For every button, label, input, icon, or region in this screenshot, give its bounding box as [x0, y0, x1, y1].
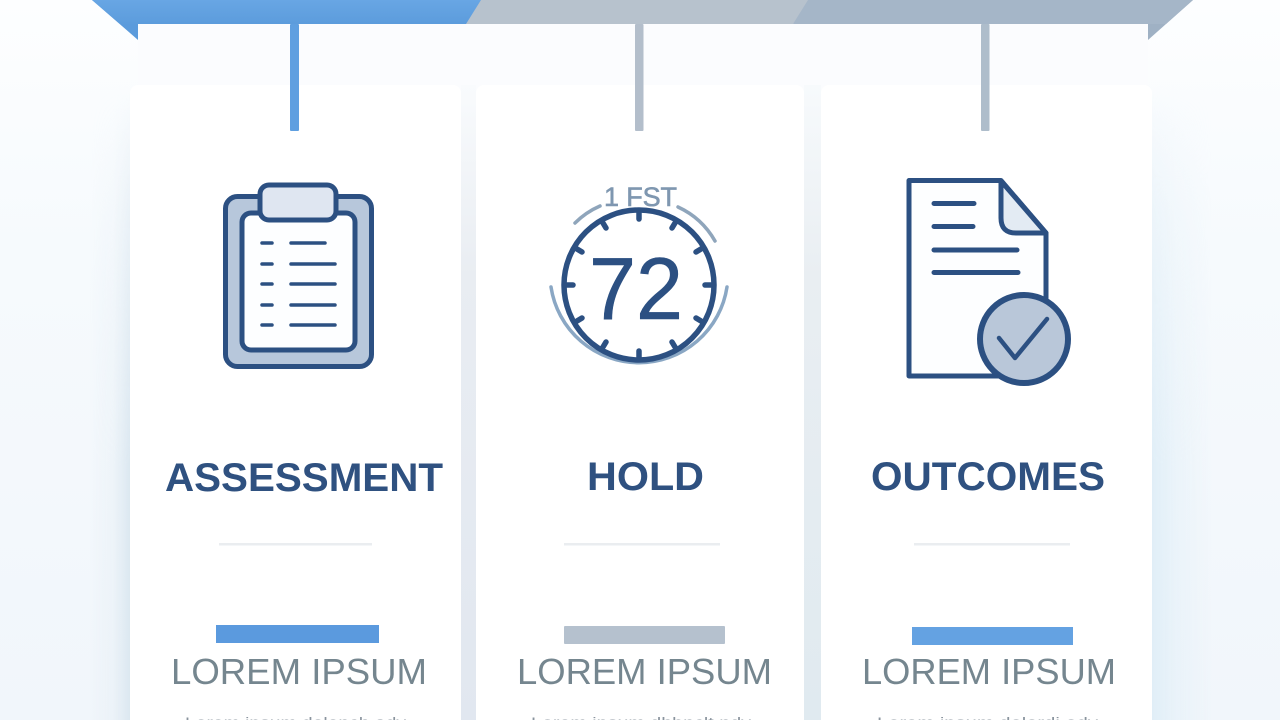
card: [821, 85, 1152, 720]
divider: [219, 543, 372, 546]
panel: assessment: [130, 24, 461, 720]
label: LOREM IPSUM: [862, 651, 1116, 692]
heading: outcomes: OUTCOMES: [871, 455, 1105, 499]
accent bar: [912, 627, 1073, 645]
connector: [635, 24, 644, 131]
heading: assessment: ASSESSMENT: [165, 456, 443, 500]
ribbon: blue segment: [92, 0, 481, 24]
icon: document with check: [909, 180, 1068, 383]
clock caption: 1 FST: [604, 182, 677, 212]
side shadows: [115, 156, 1181, 720]
connector: [290, 24, 299, 131]
panel: outcomes: [821, 24, 1152, 720]
connector: [981, 24, 990, 131]
label: LOREM IPSUM: [517, 651, 772, 692]
icon: 72 clock: [551, 182, 727, 363]
icon: clipboard: [226, 185, 372, 366]
panel: hold: [476, 24, 804, 720]
accent bar: [216, 625, 379, 643]
accent bar: [564, 626, 725, 644]
card: [476, 85, 804, 720]
divider: [564, 543, 720, 546]
card: [130, 85, 461, 720]
ribbon: right fold: [1148, 0, 1193, 40]
card gaps: [461, 85, 821, 720]
heading: hold: HOLD: [587, 455, 704, 499]
ribbon: [92, 0, 1193, 40]
ribbon: dark grey segment: [793, 0, 1193, 24]
clock number: 72: [589, 239, 683, 338]
ribbon: left fold: [92, 0, 138, 40]
ribbon: grey segment: [460, 0, 808, 24]
backing panel: [138, 24, 1148, 104]
divider: [914, 543, 1070, 546]
label: LOREM IPSUM: [171, 651, 427, 692]
